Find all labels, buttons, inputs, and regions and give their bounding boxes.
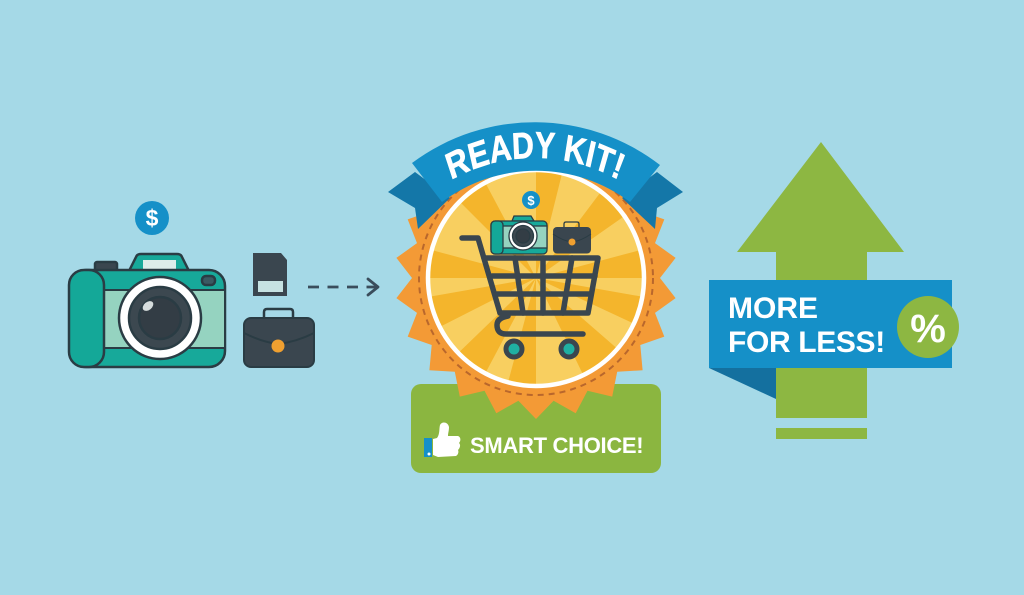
percent badge [897, 296, 959, 358]
ribbon title: READY KIT! [444, 132, 625, 180]
panel: smart choice [411, 384, 661, 473]
icon: memory card [253, 253, 287, 296]
starburst seal [396, 137, 676, 419]
ribbon tail right [622, 172, 683, 229]
banner text: FOR LESS! [728, 326, 885, 359]
ribbon tail left [388, 172, 450, 229]
icon: small camera [491, 216, 547, 254]
ribbon [412, 122, 660, 202]
arrow: dashed to badge [308, 279, 378, 295]
banner text: MORE [728, 292, 818, 325]
icon: shopping cart [462, 238, 598, 357]
icon: dollar coin: $ [146, 205, 159, 231]
sunburst disc [430, 172, 642, 384]
badge: ready kit [388, 122, 683, 419]
icon: briefcase [244, 309, 314, 367]
label: smart choice: SMART CHOICE! [470, 433, 643, 458]
banner text [728, 292, 885, 359]
stitched ring [419, 161, 653, 395]
banner: more for less [709, 280, 959, 399]
icon: small briefcase [553, 222, 591, 254]
icon: dollar coin [135, 201, 169, 235]
icon: thumbs up [424, 423, 460, 457]
arrow: up [737, 142, 904, 439]
percent badge: % [910, 307, 946, 351]
icon: small dollar: $ [527, 193, 535, 208]
icon: camera [69, 254, 225, 367]
icon: small dollar [522, 191, 540, 209]
